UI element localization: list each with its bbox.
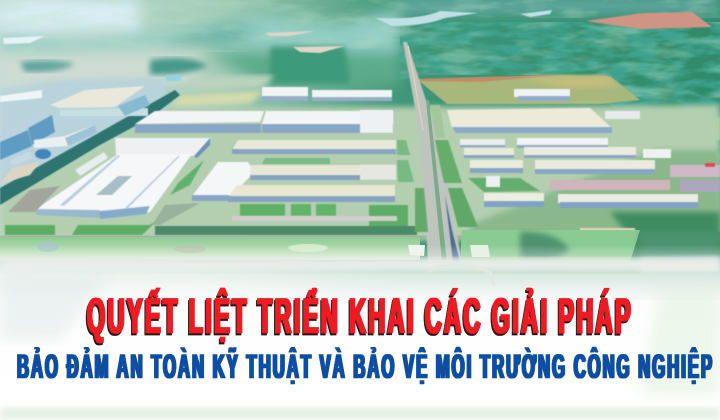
warehouse: large white left factory (36, 138, 210, 219)
main title: red headline with dark offset shadow: QUYẾT LIỆT TRIỂN KHAI CÁC GIẢI PHÁP (86, 289, 630, 347)
red clay hill (586, 12, 712, 29)
left plant ground (0, 78, 165, 190)
sandy stockpile yard (50, 86, 145, 108)
ground of the industrial park (0, 105, 720, 240)
lake (375, 10, 552, 26)
faint washed-out ground under the fade (0, 275, 720, 420)
tree belt left (0, 90, 180, 205)
warehouses: central rows (135, 87, 396, 202)
tree row and striped lot in front of central factories (0, 216, 720, 238)
grass band below the park (0, 230, 720, 272)
main title: red headline with dark offset shadow: QUYẾT LIỆT TRIỂN KHAI CÁC GIẢI PHÁP (87, 287, 631, 345)
left heavy industry plant (0, 75, 181, 184)
dry field behind factories (418, 75, 640, 104)
roundabout (428, 265, 494, 285)
warehouses: right rows (360, 89, 698, 208)
white fade panel behind the title (0, 245, 720, 420)
green verges beside highway (415, 105, 540, 232)
subtitle: blue second line: BẢO ĐẢM AN TOÀN KỸ THUẬT VÀ BẢO VỆ MÔI TRƯỜNG CÔNG NGHIỆP (17, 345, 712, 386)
container yard lots (540, 163, 720, 262)
pale clearings (265, 31, 345, 53)
highway (403, 42, 462, 262)
right side meadows (650, 118, 720, 144)
pale road strip (0, 258, 720, 270)
distant hills and forest (0, 0, 720, 300)
green lawns between central rows (5, 140, 414, 235)
parking cars left (8, 186, 60, 212)
